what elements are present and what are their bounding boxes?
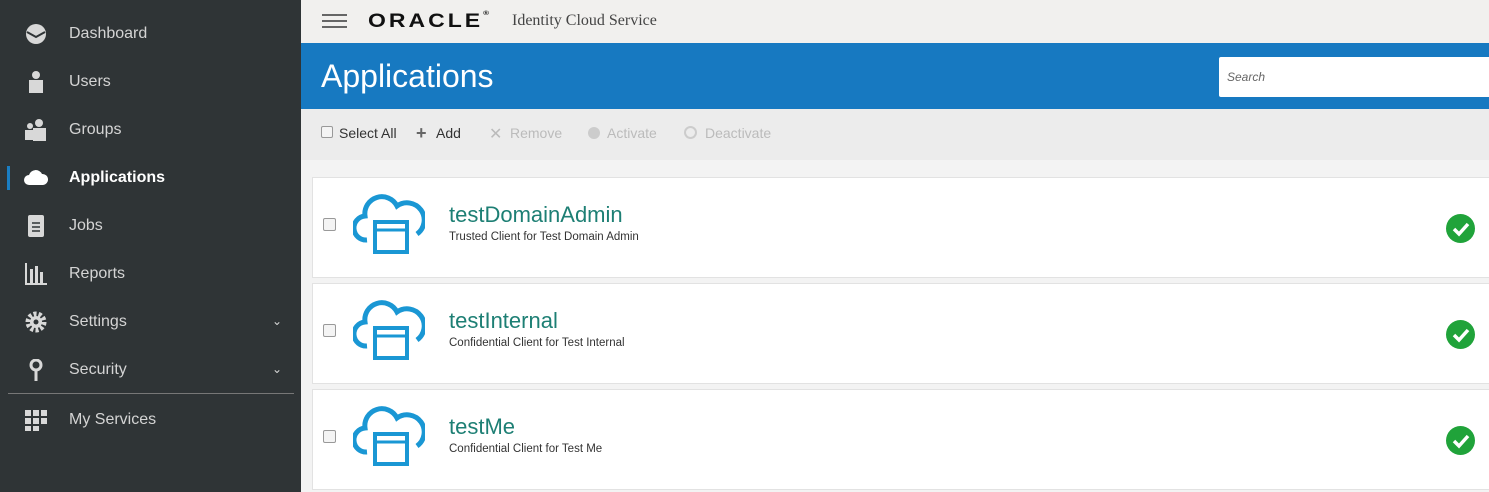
card: testInternal: testInternal	[449, 308, 558, 333]
sidebar	[0, 0, 301, 492]
card: testDomainAdmin: testDomainAdmin	[449, 202, 623, 227]
toolbar: Deactivate	[705, 125, 771, 141]
card: testInternal: Confidential Client for Test Internal	[449, 337, 625, 349]
sidebar: ⌄	[272, 362, 282, 376]
sidebar: Security	[69, 361, 127, 378]
sidebar: ⌄	[272, 314, 282, 328]
sidebar: My Services	[69, 411, 156, 428]
card: testInternal	[312, 283, 1489, 384]
logo: ORACLE®	[368, 9, 489, 31]
active marker	[7, 166, 10, 190]
nav item: Security	[30, 359, 282, 381]
nav item: Jobs	[28, 215, 103, 237]
toolbar: Add	[436, 125, 461, 141]
card: testMe	[312, 389, 1489, 490]
card: testDomainAdmin	[312, 177, 1489, 278]
card: testMe: testMe	[449, 414, 515, 439]
nav item: Applications	[24, 169, 165, 186]
nav item: Users	[29, 71, 111, 93]
nav item: Settings	[26, 312, 282, 332]
icon: hamburger	[322, 14, 347, 28]
sidebar: Settings	[69, 313, 127, 330]
sidebar: Applications	[69, 169, 165, 186]
toolbar: Activate	[607, 125, 657, 141]
toolbar: +	[416, 123, 427, 143]
header band	[301, 43, 1489, 109]
card: testDomainAdmin: Trusted Client for Test Domain Admin	[449, 231, 639, 243]
toolbar: ✕	[489, 126, 502, 143]
sidebar: Groups	[69, 121, 121, 138]
sidebar: Jobs	[69, 217, 103, 234]
top bar	[301, 0, 1489, 43]
search box	[1219, 57, 1489, 97]
page title: Applications	[321, 58, 494, 94]
service name: Identity Cloud Service	[512, 12, 657, 29]
nav item: My Services	[25, 410, 156, 431]
nav item: Dashboard	[26, 24, 147, 44]
sidebar: Dashboard	[69, 25, 147, 42]
nav item: Groups	[25, 119, 121, 141]
card: testMe: Confidential Client for Test Me	[449, 443, 602, 455]
nav item: Reports	[25, 263, 125, 285]
toolbar: Remove	[510, 125, 562, 141]
sidebar: Reports	[69, 265, 125, 282]
sidebar: Users	[69, 73, 111, 90]
toolbar	[301, 109, 1489, 160]
search box: Search	[1227, 70, 1265, 84]
toolbar: Select All	[339, 125, 397, 141]
